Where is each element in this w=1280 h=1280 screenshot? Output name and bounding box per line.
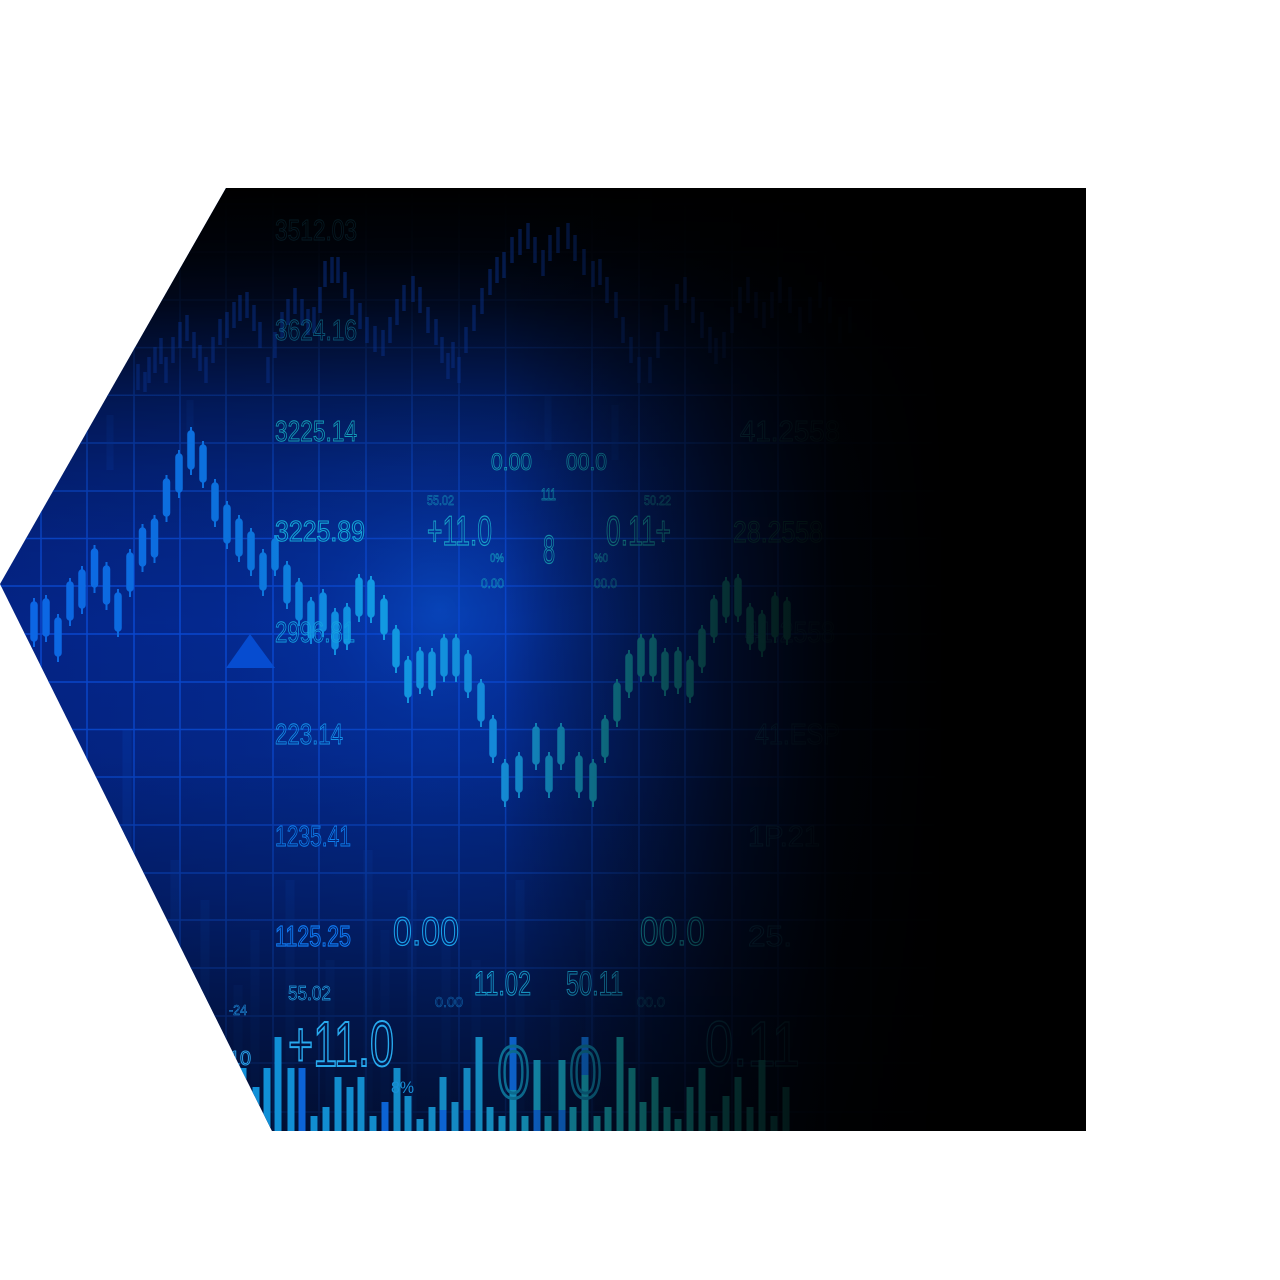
label: 25.: 25. (748, 921, 792, 953)
label: +11.0 center: +11.0 (427, 507, 492, 554)
ghost candlestick series (138, 223, 850, 392)
label: 55.02 upper: 55.02 (427, 492, 454, 508)
vertical fade overlay (0, 188, 880, 1131)
label: 10: 10 (229, 1048, 251, 1070)
label: 00.0 center small: 00.0 (594, 575, 617, 591)
label: 0.11 dim large: 0.11 (705, 1008, 800, 1080)
bar chart (243, 1037, 786, 1131)
label: 50.11: 50.11 (566, 965, 623, 1003)
label: 8%: 8% (391, 1078, 414, 1097)
label: 28.2558: 28.2558 (733, 516, 823, 549)
label: 3512.03: 3512.03 (275, 215, 357, 247)
label: 223.14: 223.14 (275, 719, 343, 751)
label: 1P.21: 1P.21 (748, 821, 820, 853)
label: 00.0 dim: 00.0 (637, 994, 665, 1011)
label: 50.22: 50.22 (644, 492, 671, 508)
label: 3624.16: 3624.16 (275, 315, 357, 347)
icon: triangle marker (226, 634, 275, 668)
grid lines (0, 188, 817, 1131)
label: %0: %0 (594, 551, 608, 565)
label: 41.ESP: 41.ESP (755, 719, 840, 751)
label: 1125.25: 1125.25 (275, 921, 351, 953)
label: 0.11+ center: 0.11+ (606, 507, 671, 554)
label: 111: 111 (541, 485, 556, 504)
candlestick chart wicks (34, 427, 787, 807)
label: 0.00 large: 0.00 (393, 910, 459, 954)
data labels (229, 215, 840, 1114)
label: 0.00 dim: 0.00 (435, 994, 463, 1011)
label: 41.258: 41.2558 (745, 617, 835, 649)
label: -24: -24 (229, 1002, 247, 1019)
label: 3225.14: 3225.14 (275, 416, 357, 448)
label: 11 center tall: 8 (543, 528, 555, 572)
label: 0.00 upper: 0.00 (491, 449, 532, 476)
stock market chart panel (0, 188, 1086, 1131)
label: 00.0 upper: 00.0 (566, 449, 607, 476)
label: 11.02: 11.02 (474, 965, 531, 1003)
label: digit 0 left: 0 (497, 1031, 530, 1114)
label: 2996.81: 2996.81 (275, 617, 355, 649)
label: 0.00 center small: 0.00 (481, 575, 504, 591)
label: 55.02 lower: 55.02 (288, 983, 331, 1005)
label: 1235.41: 1235.41 (275, 821, 351, 853)
dim background columns (106, 404, 551, 1092)
background panel (0, 188, 886, 1131)
label: digit 0 right: 0 (569, 1031, 602, 1114)
label: 00.0 large: 00.0 (640, 910, 705, 954)
label: +11.0 large: +11.0 (288, 1008, 394, 1080)
label: 0%: 0% (490, 551, 504, 565)
label: 3225.89: 3225.89 (275, 516, 365, 548)
candlestick chart bodies (34, 434, 787, 798)
horizontal fade overlay (500, 188, 1086, 1131)
label: 41.2558: 41.2558 (740, 416, 840, 448)
